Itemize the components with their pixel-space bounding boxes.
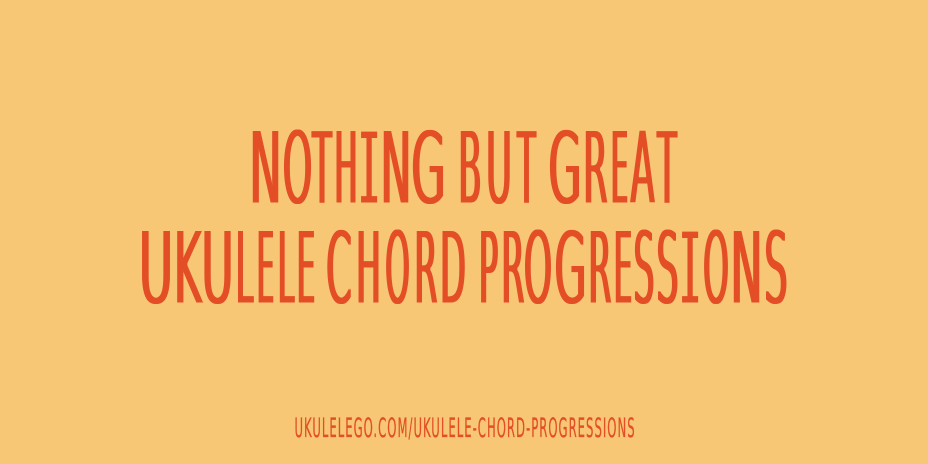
title line 2: E bbox=[257, 210, 274, 328]
title line 2: L bbox=[278, 210, 294, 328]
title line 1: E bbox=[611, 110, 628, 228]
title line 1: N bbox=[381, 110, 411, 228]
title line 2: S bbox=[634, 210, 654, 328]
title line 2: H bbox=[356, 210, 381, 328]
title line 2: U bbox=[139, 210, 173, 328]
title line 2: U bbox=[202, 210, 233, 328]
title line 2: E bbox=[297, 210, 315, 328]
title line 2: O bbox=[703, 210, 729, 328]
title line 2: N bbox=[731, 210, 762, 328]
title line 1 bbox=[250, 110, 677, 238]
title line 2: R bbox=[502, 210, 524, 328]
title line 1: R bbox=[583, 110, 608, 228]
title line 2: O bbox=[524, 210, 552, 328]
title line 2: C bbox=[326, 210, 352, 328]
title line 1: G bbox=[411, 110, 446, 228]
title line 1: T bbox=[517, 110, 536, 228]
source url: UKULELEGO.COM/UKULELE-CHORD-PROGRESSIONS bbox=[294, 412, 635, 443]
title line 2: P bbox=[479, 210, 498, 328]
title line 1: B bbox=[458, 110, 482, 228]
title line 2: E bbox=[614, 210, 632, 328]
title line 2 bbox=[139, 210, 788, 338]
title line 2: S bbox=[657, 210, 678, 328]
title line 1: U bbox=[486, 110, 512, 228]
title line 2: L bbox=[236, 210, 253, 328]
title line 1: T bbox=[312, 110, 332, 228]
title line 2: G bbox=[555, 210, 586, 328]
title line 2: K bbox=[174, 210, 203, 328]
title line 2: R bbox=[588, 210, 612, 328]
title: T bbox=[657, 110, 677, 228]
title line 2: R bbox=[414, 210, 438, 328]
title line 2: D bbox=[440, 210, 466, 328]
title line 1: H bbox=[334, 110, 358, 228]
title line 1: O bbox=[283, 110, 312, 228]
title line 1: N bbox=[250, 110, 281, 228]
title line 2: I bbox=[680, 212, 701, 338]
title line 1: I bbox=[359, 112, 380, 238]
banner background and text: S bbox=[764, 210, 788, 328]
title line 2: O bbox=[385, 210, 410, 328]
title line 1: A bbox=[630, 110, 654, 228]
title line 1: G bbox=[548, 110, 582, 228]
title bbox=[139, 110, 788, 338]
